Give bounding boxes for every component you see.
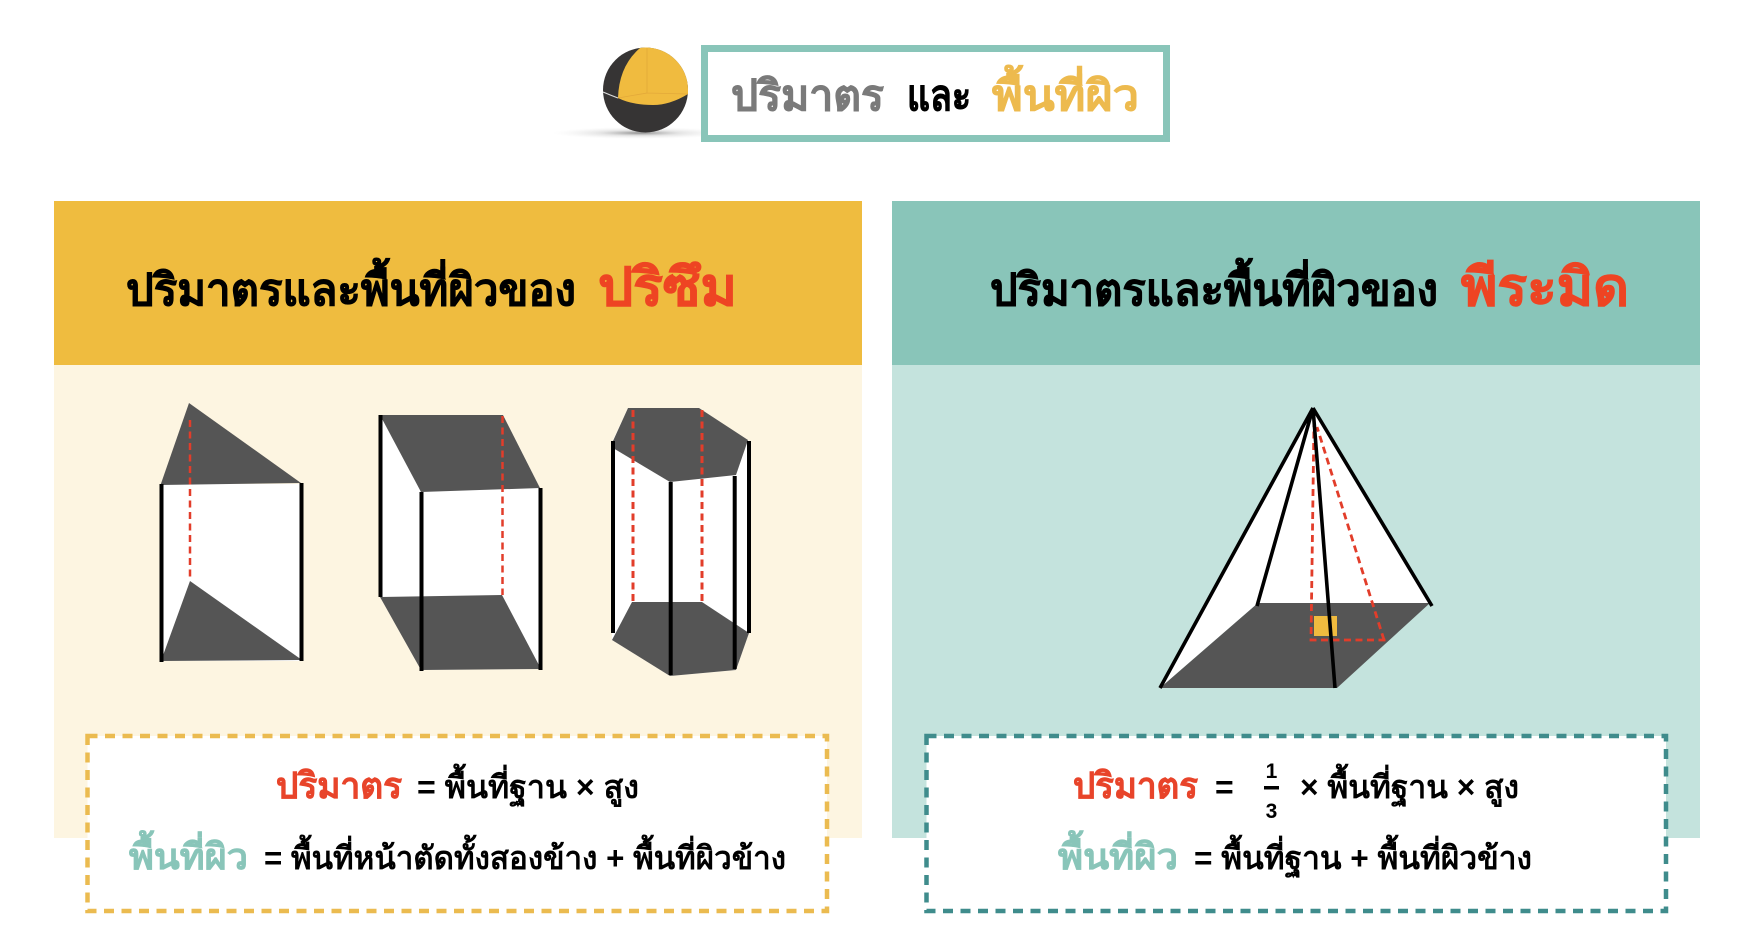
panel body [892, 201, 1700, 838]
formula: prism volume: ปริมาตร [276, 765, 403, 806]
heading: pyramid: พีระมิด [1461, 259, 1629, 317]
formula: pyramid volume [1073, 760, 1519, 823]
formula: prism surface area: พื้นที่ผิว [129, 830, 248, 877]
icon: pyramid [1160, 408, 1432, 688]
formula: prism surface area [129, 830, 786, 877]
formula: pyramid surface area: = พื้นที่ฐาน + พื้นที่ผิวข้าง [1194, 834, 1532, 879]
formula: pyramid surface area: พื้นที่ผิว [1058, 830, 1178, 877]
panel body [54, 201, 862, 838]
heading: pyramid [990, 257, 1629, 317]
formula box: prism [88, 736, 827, 911]
formula: prism volume [276, 763, 639, 808]
formula: pyramid volume: ปริมาตร [1073, 765, 1199, 806]
formula: prism surface area: = พื้นที่หน้าตัดทั้งสองข้าง + พื้นที่ผิวข้าง [264, 834, 786, 876]
icon: sphere with cut-out [552, 48, 728, 139]
heading: pyramid: ปริมาตรและพื้นที่ผิวของ [990, 257, 1438, 315]
formula: pyramid volume: 1 [1266, 760, 1278, 783]
title box [704, 48, 1166, 138]
formula: pyramid volume: × พื้นที่ฐาน × สูง [1300, 763, 1519, 808]
formula: prism volume: = พื้นที่ฐาน × สูง [417, 763, 639, 808]
formula box: pyramid [926, 736, 1666, 911]
heading: prism [126, 257, 737, 317]
title word: surface area: พื้นที่ผิว [992, 64, 1139, 119]
panel header band [54, 201, 862, 365]
heading: prism: ปริซึม [598, 259, 737, 317]
title word: and: และ [907, 72, 971, 119]
icon: triangular prism [160, 403, 302, 662]
icon: parallelepiped prism [380, 415, 541, 671]
formula: pyramid volume: = [1215, 769, 1234, 805]
formula: pyramid volume: 3 [1266, 800, 1277, 823]
heading: prism: ปริมาตรและพื้นที่ผิวของ [126, 257, 576, 315]
title word: volume: ปริมาตร [731, 72, 884, 119]
panel: pyramid [892, 201, 1700, 911]
panel: prism [54, 201, 862, 911]
formula: pyramid surface area [1058, 830, 1532, 879]
icon: hexagonal prism [612, 408, 749, 676]
panel header band [892, 201, 1700, 365]
